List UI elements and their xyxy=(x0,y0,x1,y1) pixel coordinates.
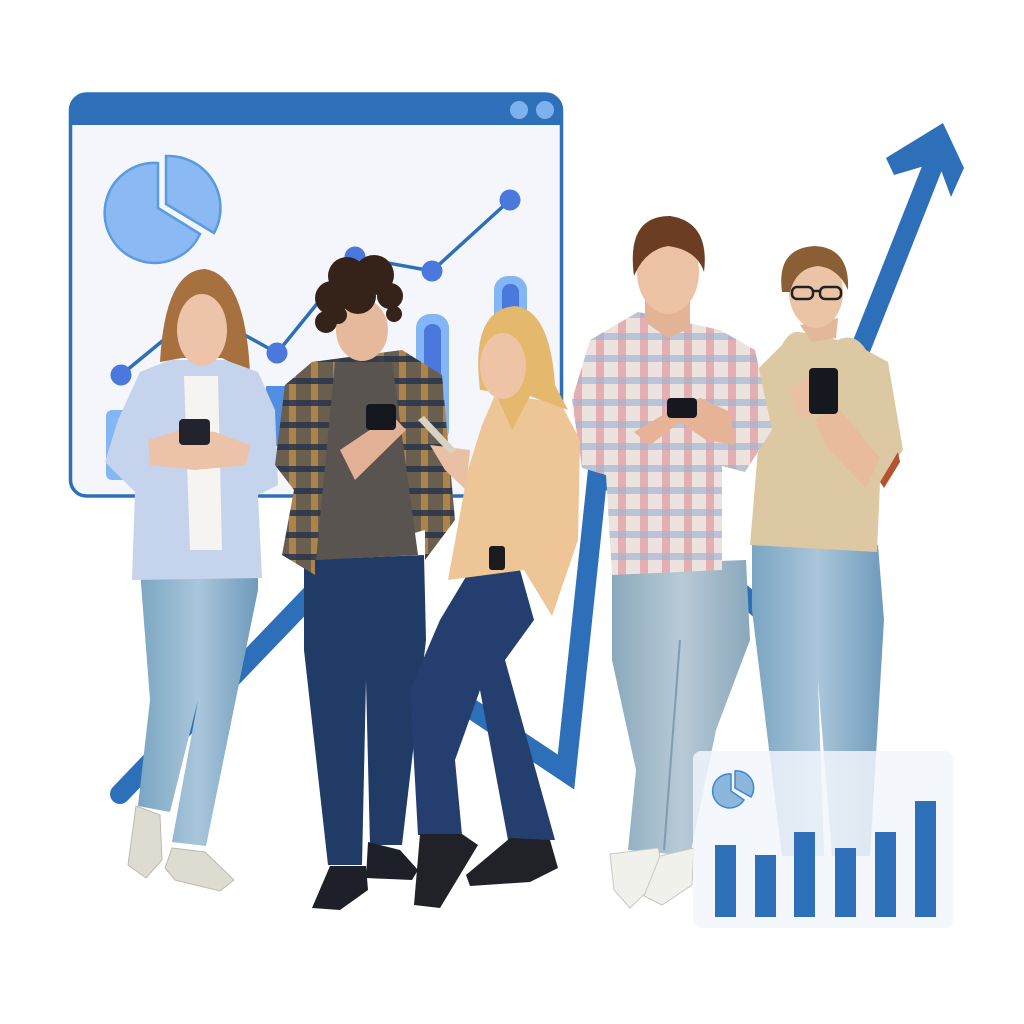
jeans xyxy=(612,560,750,856)
person 1: woman in light blue shirt xyxy=(105,269,278,891)
jeans xyxy=(304,555,426,865)
hands xyxy=(634,398,735,445)
jeans xyxy=(752,545,884,856)
person 2: man in dark plaid shirt xyxy=(275,255,455,910)
phone xyxy=(809,368,838,414)
hair xyxy=(478,306,568,430)
curly hair xyxy=(315,255,403,333)
small bars xyxy=(715,801,936,917)
forearms xyxy=(760,385,822,470)
person 3: blonde woman in tan blouse xyxy=(410,306,580,908)
hair xyxy=(160,269,250,372)
boots xyxy=(414,834,558,908)
growth arrow xyxy=(120,123,964,794)
shoes xyxy=(128,806,234,891)
person 5: man in beige hoodie xyxy=(750,246,903,856)
shirt xyxy=(275,350,455,575)
window buttons xyxy=(510,101,554,119)
browser window panel xyxy=(69,93,563,496)
hoodie xyxy=(750,332,903,552)
pie chart icon xyxy=(105,156,220,263)
blouse xyxy=(448,395,580,616)
jeans xyxy=(138,560,258,846)
small pie icon xyxy=(713,771,754,808)
white sneakers xyxy=(610,848,694,908)
bar chart in window xyxy=(106,276,527,480)
jeans xyxy=(410,570,555,840)
shirt xyxy=(572,312,772,575)
glasses xyxy=(792,287,841,299)
shirt xyxy=(105,360,278,580)
small chart card xyxy=(693,751,953,928)
person 4: man in plaid shirt xyxy=(572,216,772,908)
shoes xyxy=(312,842,418,910)
line chart xyxy=(110,190,520,386)
